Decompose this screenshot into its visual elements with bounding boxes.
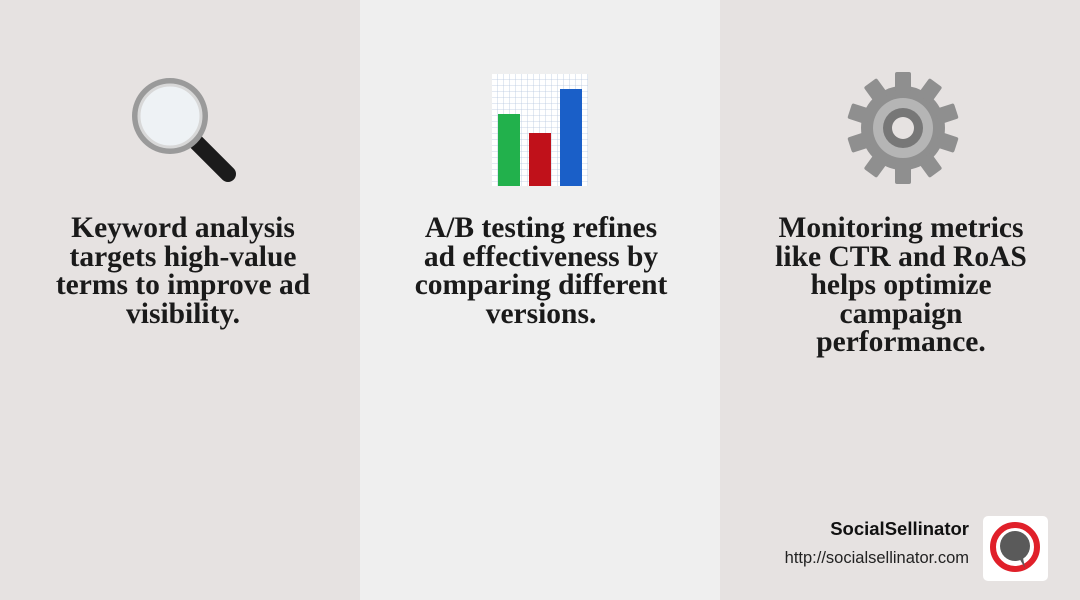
brand url: http://socialsellinator.com [785,549,969,567]
panel: A/B testing [360,0,720,600]
logo [983,516,1048,581]
icon: gear [848,72,958,184]
icon: bar chart [492,74,588,186]
panel: keyword analysis [0,0,360,600]
icon: magnifying glass [132,78,236,182]
panel: monitoring [720,0,1080,600]
brand name: SocialSellinator [830,518,969,539]
text: monitoring: Monitoring metrics like CTR and RoAS helps optimize campaign performance. [775,212,1027,358]
text: A/B: A/B testing refines ad effectiveness by comparing different versions. [415,212,667,330]
text: keyword: Keyword analysis targets high-value terms to improve ad visibility. [56,212,310,330]
